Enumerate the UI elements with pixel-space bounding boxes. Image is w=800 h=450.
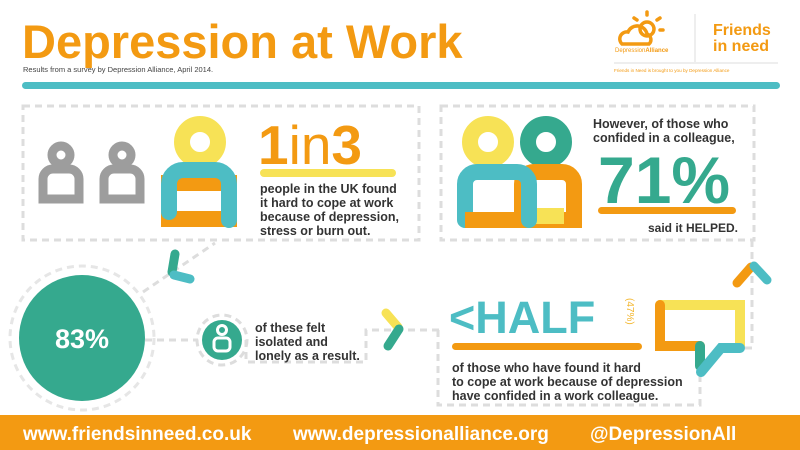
teal divider bar (22, 82, 780, 89)
text: people in the UK: stress or burn out. (260, 224, 370, 238)
connectors (143, 240, 752, 405)
text: however: However, of those who (593, 117, 729, 131)
panel: less than half: to cope at work because of depression (452, 375, 683, 389)
arrow: up chevron (737, 266, 767, 283)
panel: 71% (441, 106, 754, 240)
panel: 1 in 3 (23, 106, 419, 240)
logo block: in need (713, 38, 769, 55)
circle: 83%: 83% (55, 324, 109, 354)
text: people in the UK: people in the UK found (260, 182, 397, 196)
stat: 1 in 3: 1in3 (258, 114, 362, 176)
text: people in the UK: because of depression, (260, 210, 399, 224)
panel: less than half (449, 292, 683, 403)
stat: 71%: 71% (598, 143, 730, 217)
text: people in the UK: it hard to cope at work (260, 196, 393, 210)
arrow: green chevron down (172, 254, 190, 279)
logo block: DepressionAlliance (615, 48, 669, 54)
text: however: confided in a colleague, (593, 131, 735, 145)
panel: less than half: (47%) (624, 298, 635, 325)
panel: less than half: <HALF (449, 292, 595, 343)
icon: gray person 2 (104, 146, 140, 199)
icon: highlighted person (169, 124, 229, 220)
subtitle: Results from a survey by Depression Alliance, April 2014. (23, 65, 213, 74)
footer: @DepressionAll (590, 424, 736, 445)
text: isolated: of these felt (255, 321, 326, 335)
panel: less than half: of those who have found it hard (452, 361, 641, 375)
text: isolated: isolated and (255, 335, 328, 349)
footer: www.friendsinneed.co.uk (22, 424, 252, 445)
icon: cloud sun (620, 12, 663, 44)
title: Depression at Work (22, 15, 463, 68)
arrow: right chevron (386, 313, 399, 346)
panel: less than half: have confided in a work colleague. (452, 389, 658, 403)
icon: speech bubble (660, 305, 740, 372)
icon: two people (465, 124, 574, 220)
logo block (614, 12, 778, 73)
logo block: Friends (713, 22, 771, 39)
logo block: Friends in Need is brought to you by Depression Alliance (614, 68, 730, 73)
footer: www.depressionalliance.org (292, 424, 549, 445)
icon: gray person 1 (43, 146, 79, 199)
text: isolated: lonely as a result. (255, 349, 360, 363)
circle: 83% (10, 266, 154, 410)
icon: small person (202, 320, 242, 360)
footer (0, 415, 800, 450)
panel: 71%: said it HELPED. (648, 221, 738, 235)
